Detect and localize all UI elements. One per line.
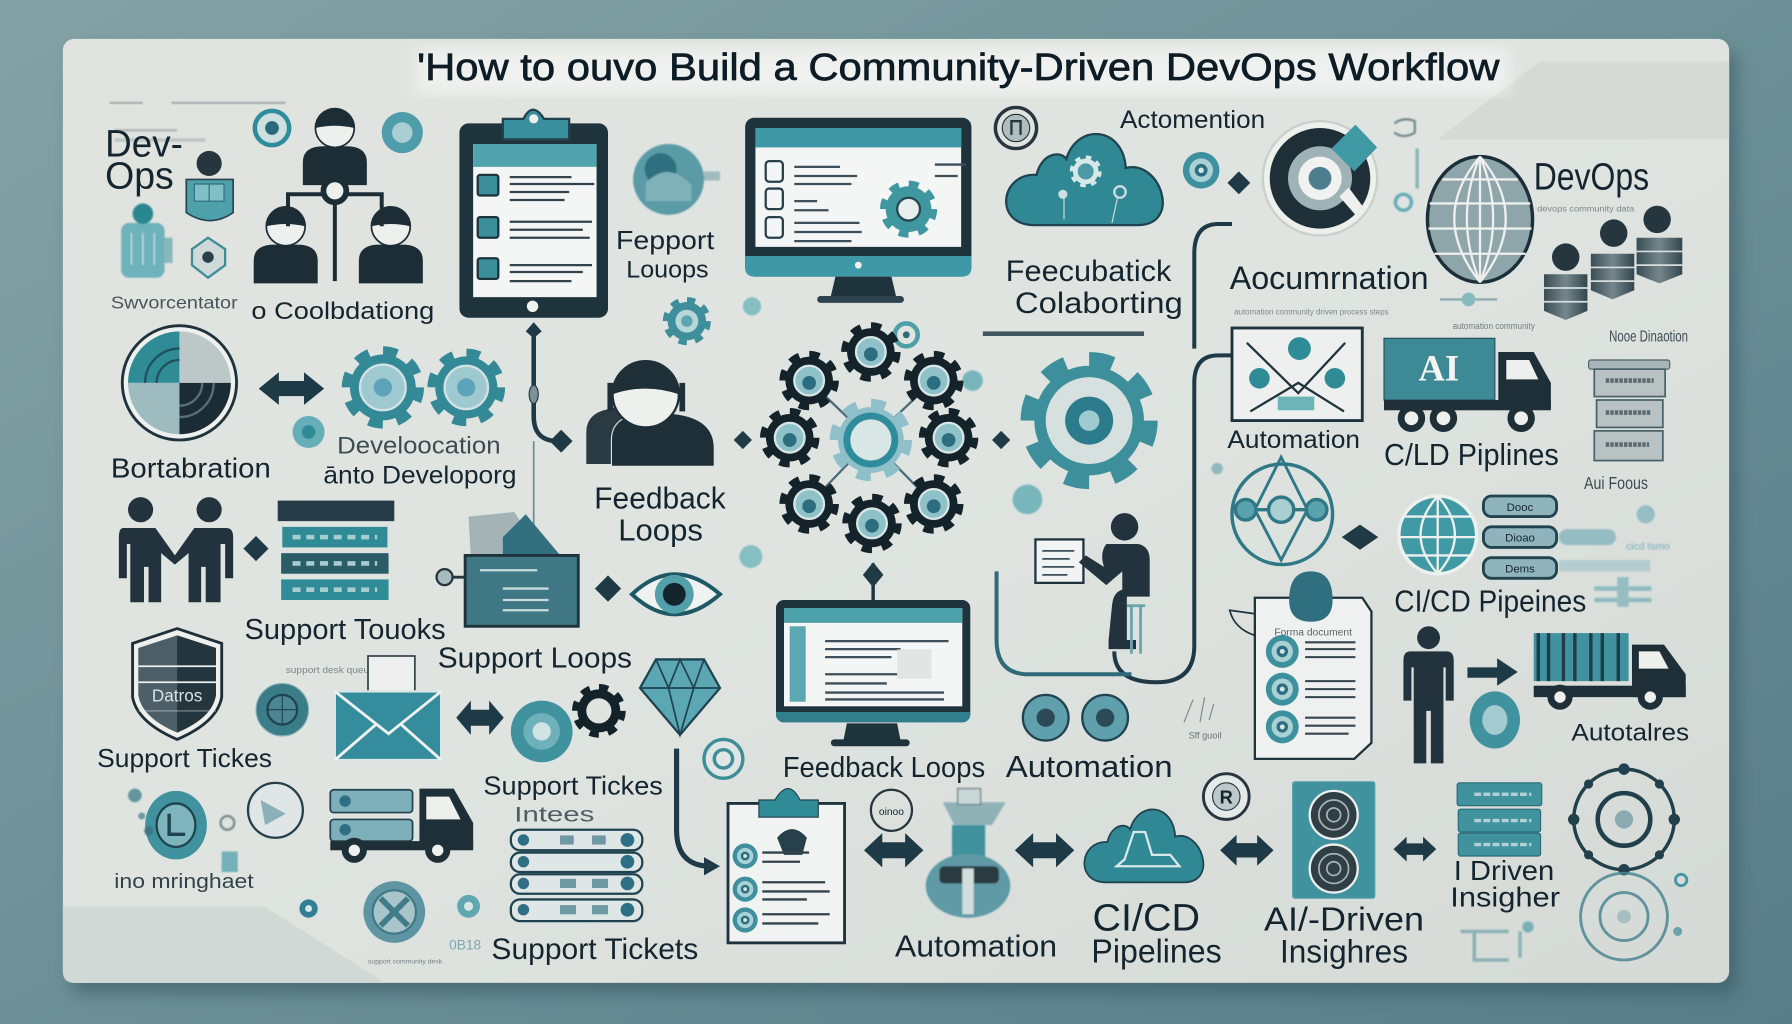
label: AI-driven insights: AI/-Driven [1264,901,1424,938]
label: development [323,433,517,489]
pills: pipeline: Dems [1505,564,1535,576]
label: node direction: Nooe Dinaotion [1609,329,1688,346]
icon: envelope [335,656,441,760]
icon: small accents center [739,297,1223,568]
icon: globe [1427,157,1533,282]
icon: two people handshake [119,497,233,602]
label: AI-driven insights [1264,901,1424,969]
label: automation top: Actomention [1120,106,1265,134]
icon: AI truck [1384,338,1551,429]
icon: small truck [330,789,473,859]
small text [1440,293,1535,331]
icon: eye [632,574,720,614]
icon: faded chart [1461,921,1534,960]
label: support tickets bottom: Support Tickets [491,933,698,966]
label: AI-driven insights: Insighres [1280,933,1408,969]
icon: support blob [633,144,720,215]
label: driven insights small: Insigher [1450,881,1560,912]
icon: teal medallion [1470,691,1520,749]
icon: teal ring [704,739,743,778]
label: CI/CD pipelines bottom: Pipelines [1091,933,1222,970]
label: automation small: Automation [1227,426,1360,454]
icon: bottom monitor [776,562,970,746]
label: DevOps: DevOps [1534,156,1649,198]
icon: accent bits [128,789,238,872]
text: faint note [110,103,286,142]
icon: small accents [1394,119,1417,210]
icon: teal dot [293,416,325,448]
label: development: ānto Developorg [323,461,517,489]
label: feedback loops center: Loops [618,513,703,548]
label: support tickets left: Support Tickes [97,743,272,773]
icon: small shield [192,238,225,278]
arrow [595,575,621,602]
label: feedback loops center [594,481,726,548]
label: collaboration left: Bortabration [111,453,271,484]
text: faint pipeline notes: cicd tsmo [1626,542,1670,553]
icon: teal medallion [1183,152,1219,189]
label: feedback loops center: Feedback [594,481,726,516]
text: Dev-Ops: Dev- [105,123,183,165]
panel: devops column [105,103,286,313]
label: collaboration: o Coolbdationg [251,298,434,325]
icon: envelope card [1232,328,1362,421]
label: feedback collaborating [1006,255,1183,320]
icon: speakers [1023,695,1128,741]
icon: AI panel [1293,782,1375,898]
icon: AI truck: AI [1419,348,1459,389]
icon: ticket document: Forma document [1274,627,1352,638]
text: devops community data [1537,204,1635,213]
label: support touchs: Support Touoks [245,614,446,646]
icon: teal globe [1399,496,1477,574]
text: faint numbers [368,938,482,965]
label: support loops: Fepport [616,225,715,255]
icon: bottom clipboard [728,789,845,943]
icon: bottom cloud [1084,809,1203,882]
label: Swvorcentator [111,293,238,313]
connector: L arrow [677,749,720,875]
icon: small gear [666,301,707,342]
icon: device [121,203,173,278]
icon: cloud [1006,134,1163,225]
icon: database people [1544,206,1682,320]
icon: orbit bottom [1581,873,1687,960]
arrow [456,701,504,735]
icon: diamond [640,659,720,735]
title: 'How to ouvo Build a Community-Driven DevOps Workflow [417,46,1500,88]
arrow [243,536,269,561]
icon: circuit globe [1232,457,1333,565]
icon: teal chip [511,701,573,762]
text: Dev-Ops: Ops [105,155,174,197]
icon: bottom medallion [363,881,425,943]
arrow [1393,837,1436,861]
label: insight: ino mringhaet [114,870,254,893]
connector: tablet to feedback [526,322,573,549]
label: automation right: Autotalres [1571,720,1689,747]
label: feedback collaborating: Colaborting [1015,287,1183,320]
icon: dark gear [576,688,622,734]
arrow [259,372,324,405]
arrow [1467,658,1518,686]
arrow [864,833,923,867]
icon: shield: Datros [152,686,202,706]
icon: folder screen [437,512,578,626]
icon: R badge [1203,774,1249,819]
label: driven insights small: I Driven [1454,855,1554,886]
icon: radar [122,326,237,440]
icon: teal gears [347,352,500,423]
label: images: Intees [514,802,594,827]
icon: person with headset [586,361,714,466]
text: faint notes [1184,697,1221,740]
icon: ticket document [1230,571,1371,759]
connectors: workflow curves [997,224,1234,682]
label: CI/CD pipelines bottom: CI/CD [1093,896,1200,938]
icon: ring small [895,323,918,346]
arrow [1342,525,1378,550]
label: accumulation: Aocumrnation [1230,260,1429,296]
icon: small stamp [871,790,912,831]
label: feedback loops bottom: Feedback Loops [783,752,985,784]
label: CI/CD pipelines: C/LD Piplines [1384,437,1559,472]
text: automation community driven process steps [1234,307,1389,316]
label: support tickets center: Support Tickes [483,770,663,800]
text: Dev-Ops [105,123,183,197]
icon: ticket pills [511,830,642,921]
icon: teal disc [256,683,309,736]
icon: small stamp: oinoo [879,807,904,818]
text: faint numbers: support community desk [368,958,443,965]
text: faint notes: Sff guoil [1189,730,1221,740]
label: support loops: Louops [626,257,709,284]
label: CI/CD pipelines bottom [1091,896,1222,970]
pills: pipeline: Dioao [1505,533,1535,545]
icon: shield [133,629,222,739]
icon: standing person [1403,626,1454,763]
label: support loops lower: Support Loops [438,642,632,674]
label: feedback collaborating: Feecubatick [1006,255,1172,288]
arrow [1015,833,1074,867]
icon: ring compass [248,783,303,838]
pills: pipeline [1483,496,1650,578]
icon: teal server left [278,501,394,600]
icon: R badge: R [1220,786,1233,807]
icon: team hierarchy [254,109,423,283]
icon: seated person [1035,513,1150,654]
icon: teal medallion [145,791,207,859]
icon: automation figure [926,789,1010,918]
arrows: gear cluster [734,431,1010,449]
text: faint pipeline notes [1594,505,1670,607]
icon: teal dots [299,895,480,918]
icon: clipboard tablet [459,110,608,318]
icon: container truck [1534,633,1686,706]
pills: pipeline: Dooc [1507,502,1534,514]
text: faint note: support desk queue [286,665,375,675]
icon: orbit top [1568,763,1680,875]
label: support loops [616,225,715,284]
icon: teal server [1457,783,1542,856]
arrow [1220,835,1274,866]
icon: small badge [995,107,1037,149]
label: AI focus: Aui Foous [1584,473,1648,493]
small text: automation community [1453,321,1535,331]
label: CI/CD pipeines: CI/CD Pipeines [1394,583,1586,618]
label: automation bottom: Automation [895,929,1057,964]
icon: large teal gear [1030,362,1148,480]
icon: grey server stack [1589,360,1670,461]
icon: target [1263,121,1377,235]
text: faint numbers: 0B18 [449,938,482,953]
icon: gear cluster [764,326,974,549]
label: development: Develoocation [337,433,501,460]
label: automation center: Automation [1006,749,1173,784]
icon: monitor top [745,118,971,303]
arrow [1227,171,1250,194]
icon: badge [186,151,233,221]
label: driven insights small [1450,855,1560,912]
